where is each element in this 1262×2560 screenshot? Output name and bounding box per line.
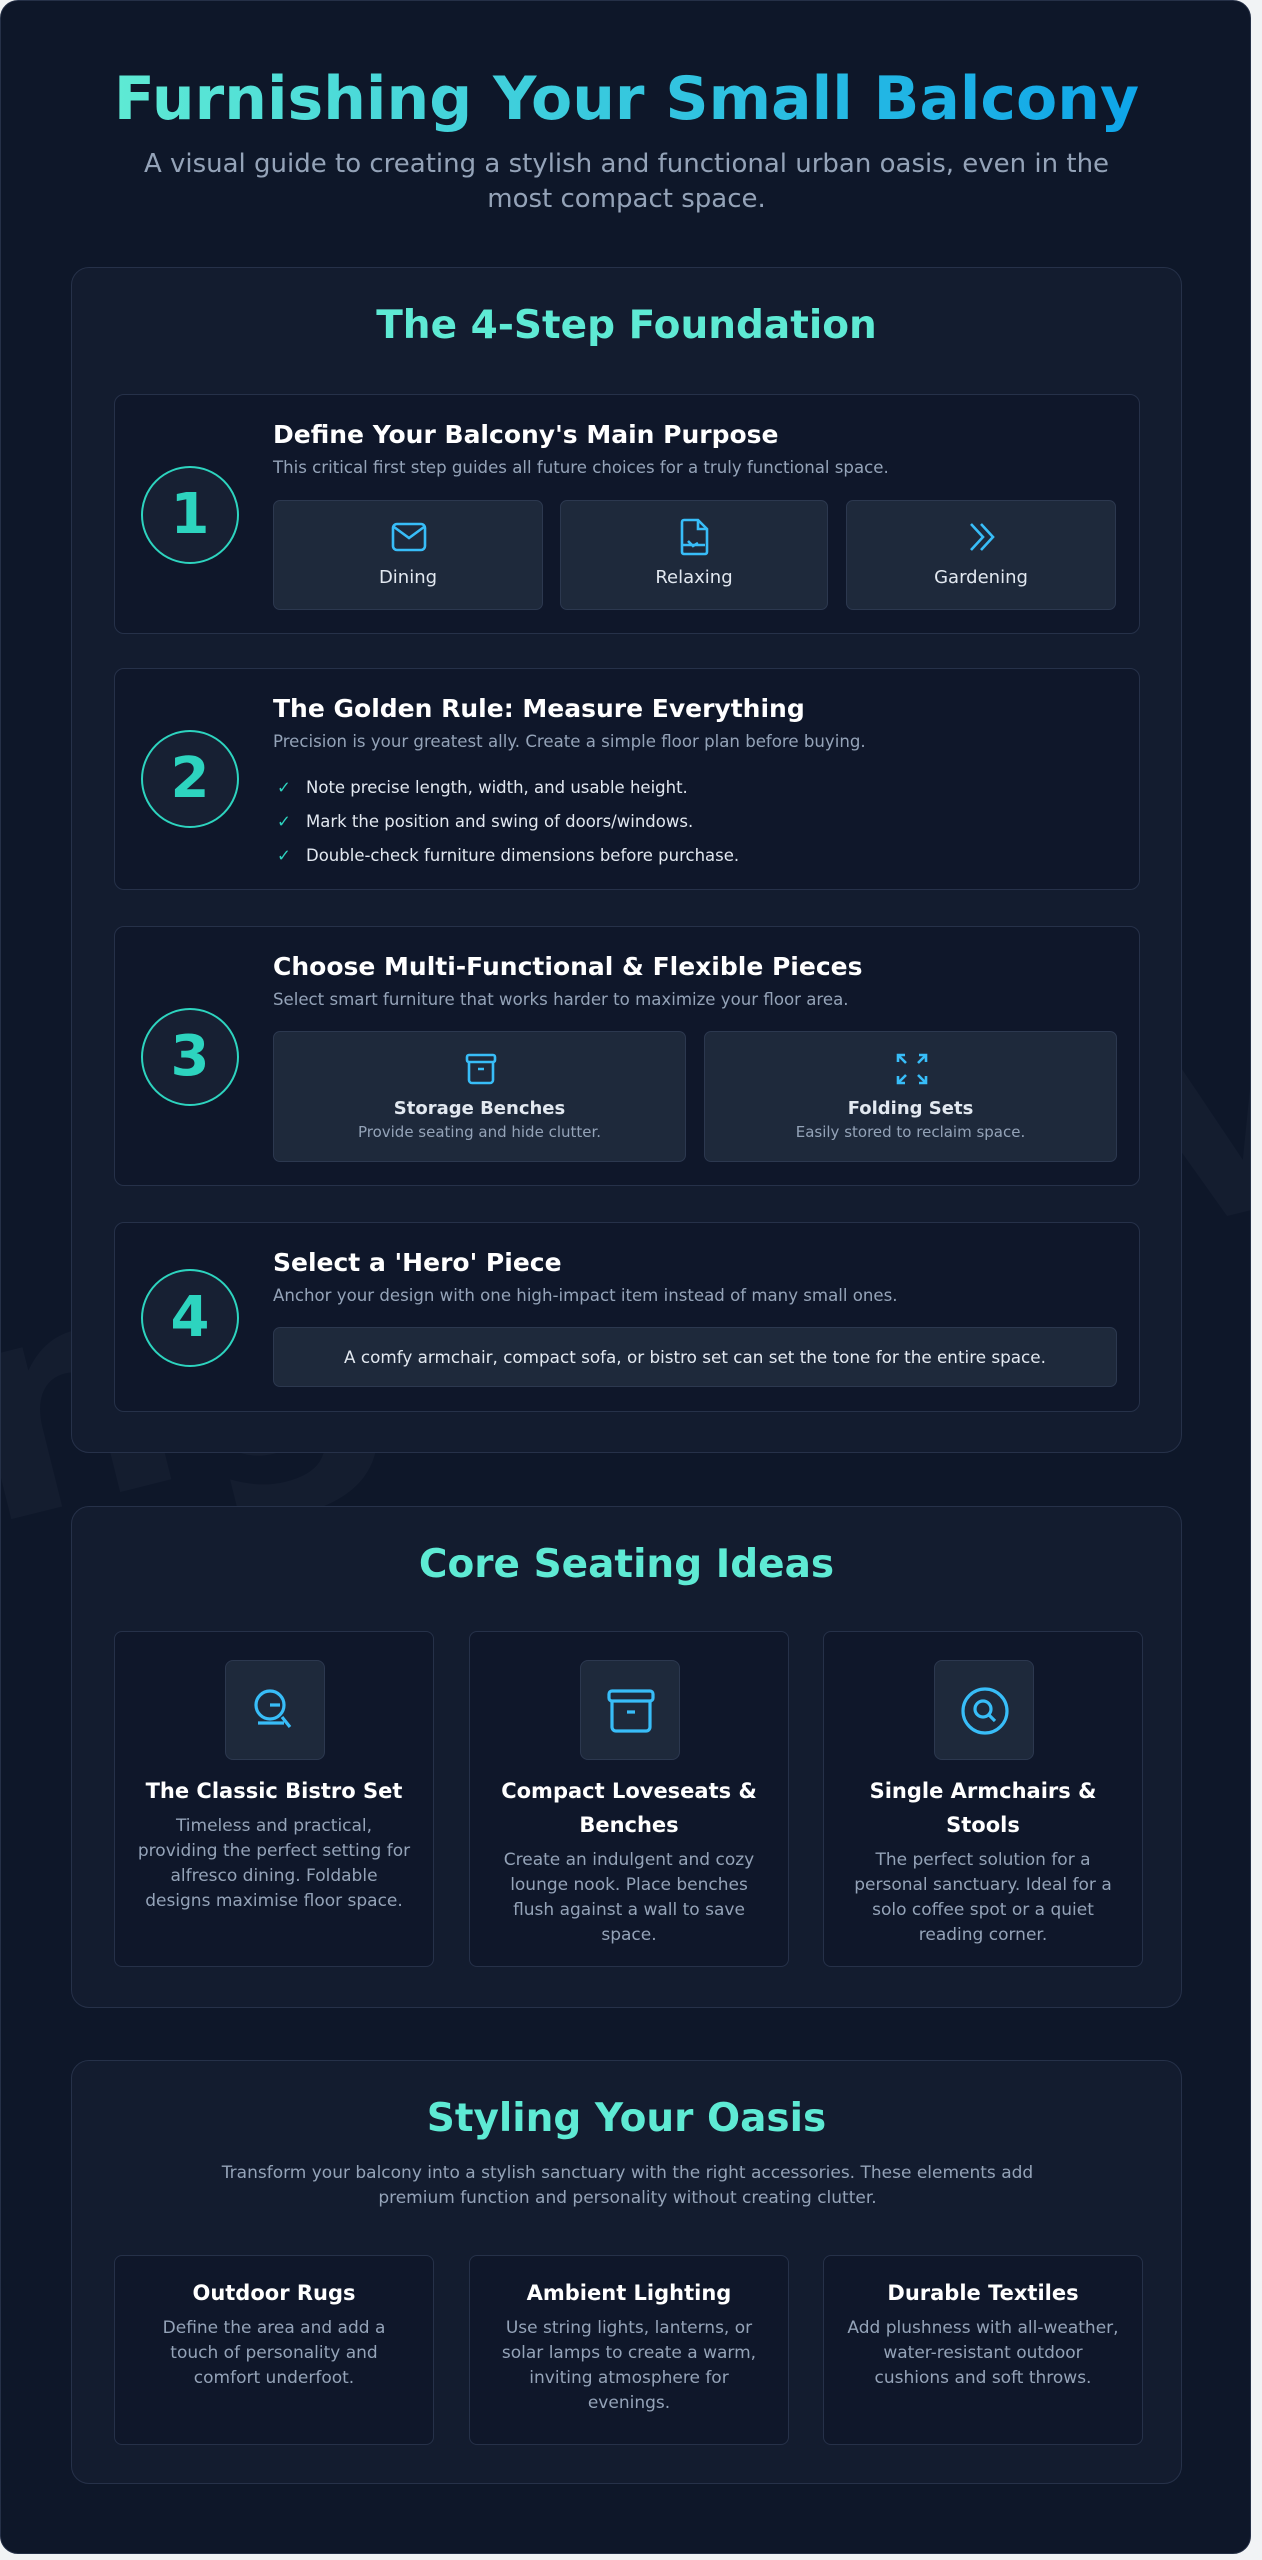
step 1 desc: This critical first step guides all future choices for a truly functional space.: [273, 458, 889, 477]
title: Furnishing Your Small Balcony: [114, 64, 1139, 134]
card: durable textiles: Add plushness with all-weather, water-resistant outdoor cushions and soft throws.: [847, 2318, 1119, 2388]
card: ambient lighting: Ambient Lighting: [527, 2281, 731, 2305]
card: bistro set: [114, 1631, 434, 1967]
circle 3: 3: [171, 1024, 209, 1089]
option: relaxing: [560, 500, 828, 610]
step 2: [114, 668, 1140, 890]
card: bistro set: Timeless and practical, providing the perfect setting for alfresco dining. Foldable designs maximise floor space.: [138, 1816, 410, 1911]
option: gardening: [846, 500, 1116, 610]
checklist: Mark the position and swing of doors/windows.: [306, 812, 693, 831]
step 4 desc: Anchor your design with one high-impact item instead of many small ones.: [273, 1286, 898, 1305]
step 3 desc: Select smart furniture that works harder to maximize your floor area.: [273, 990, 849, 1009]
step 3 title: Choose Multi-Functional & Flexible Pieces: [273, 952, 862, 981]
panel: core seating ideas: [71, 1506, 1182, 2008]
step 1 title: Define Your Balcony's Main Purpose: [273, 420, 779, 449]
checklist: Double-check furniture dimensions before purchase.: [306, 846, 739, 865]
icon: bistro: [225, 1660, 325, 1760]
heading: Core Seating Ideas: [419, 1542, 834, 1587]
card: bistro set: The Classic Bistro Set: [146, 1779, 402, 1803]
panel: styling your oasis: [71, 2060, 1182, 2484]
hero callout: [273, 1327, 1117, 1387]
icon: armchair: [934, 1660, 1034, 1760]
card: outdoor rugs: Define the area and add a touch of personality and comfort underfoot.: [163, 2318, 385, 2388]
panel: 4-step foundation: [71, 267, 1182, 1453]
heading: Styling Your Oasis: [427, 2096, 826, 2141]
option: folding sets: Folding Sets: [848, 1098, 973, 1119]
heading: The 4-Step Foundation: [376, 303, 877, 348]
checklist: [277, 778, 739, 865]
card: loveseats: Create an indulgent and cozy lounge nook. Place benches flush against a wall to save space.: [504, 1850, 754, 1945]
option: relaxing: Relaxing: [655, 567, 733, 588]
card: outdoor rugs: Outdoor Rugs: [192, 2281, 356, 2305]
checklist: ✓: [277, 778, 291, 797]
option: dining: Dining: [379, 567, 437, 588]
step 2 title: The Golden Rule: Measure Everything: [273, 694, 805, 723]
checklist: Note precise length, width, and usable height.: [306, 778, 688, 797]
card: armchairs: [823, 1631, 1143, 1967]
options: [273, 500, 1116, 610]
circle 1: [141, 466, 239, 564]
option: storage benches: Storage Benches: [394, 1098, 565, 1119]
option: gardening: Gardening: [934, 567, 1028, 588]
option: folding sets: [704, 1031, 1117, 1162]
step 4: [114, 1222, 1140, 1412]
intro text: Transform your balcony into a stylish sanctuary with the right accessories. These elements add premium function and personality without creating clutter.: [222, 2163, 1033, 2208]
circle 1: 1: [171, 482, 209, 547]
card: durable textiles: [823, 2255, 1143, 2445]
circle 2: [141, 730, 239, 828]
circle 4: [141, 1269, 239, 1367]
icon: bench: [580, 1660, 680, 1760]
card: ambient lighting: [469, 2255, 789, 2445]
step 2 desc: Precision is your greatest ally. Create a simple floor plan before buying.: [273, 732, 866, 751]
step 3: [114, 926, 1140, 1186]
card: armchairs: The perfect solution for a personal sanctuary. Ideal for a solo coffee spot or a quiet reading corner.: [854, 1850, 1112, 1945]
option: storage benches: Provide seating and hide clutter.: [358, 1123, 601, 1141]
card: loveseats: Compact Loveseats & Benches: [501, 1779, 757, 1837]
card: durable textiles: Durable Textiles: [887, 2281, 1079, 2305]
step 4 title: Select a 'Hero' Piece: [273, 1248, 562, 1277]
option: dining: [273, 500, 543, 610]
step 1: [114, 394, 1140, 634]
subtitle: A visual guide to creating a stylish and functional urban oasis, even in the most compact space.: [144, 149, 1109, 214]
circle 3: [141, 1008, 239, 1106]
card: loveseats: [469, 1631, 789, 1967]
card: ambient lighting: Use string lights, lanterns, or solar lamps to create a warm, inviting atmosphere for evenings.: [502, 2318, 756, 2413]
option: storage benches: [273, 1031, 686, 1162]
card: armchairs: Single Armchairs & Stools: [870, 1779, 1096, 1837]
checklist: ✓: [277, 846, 291, 865]
hero callout: A comfy armchair, compact sofa, or bistro set can set the tone for the entire space.: [344, 1347, 1046, 1367]
checklist: ✓: [277, 812, 291, 831]
option: folding sets: Easily stored to reclaim space.: [796, 1123, 1025, 1141]
circle 2: 2: [171, 746, 209, 811]
circle 4: 4: [171, 1285, 209, 1350]
card: outdoor rugs: [114, 2255, 434, 2445]
